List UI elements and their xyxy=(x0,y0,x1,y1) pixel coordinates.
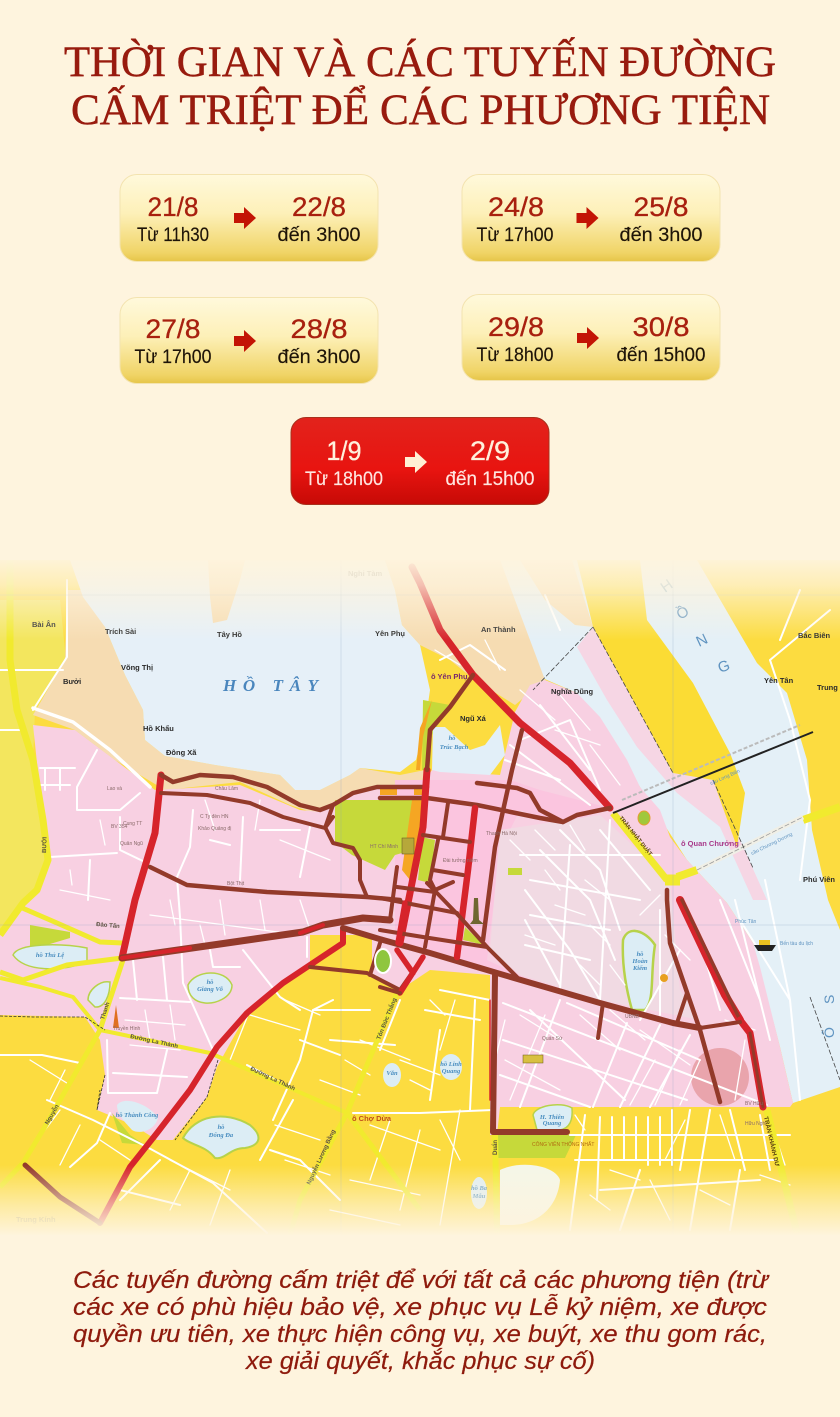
map: place labels: G xyxy=(716,657,732,677)
route: west side xyxy=(122,775,161,958)
map: place labels: N xyxy=(694,631,711,651)
route: central verticals xyxy=(400,770,427,943)
map: place labels: C Ty đèn HN xyxy=(200,814,229,820)
map: place labels: BV Hữu xyxy=(745,1101,763,1107)
map: place labels: Đường La Thành xyxy=(130,1034,179,1050)
time card: 27/8 to 28/8: 27/8 xyxy=(146,314,200,344)
time card: 21/8 to 22/8: 21/8 xyxy=(148,192,198,222)
map: old quarter and south streets xyxy=(500,820,790,1230)
map: place labels: H. Thiên xyxy=(539,1114,564,1121)
time card highlighted: 1/9 to 2/9 xyxy=(291,418,549,504)
map: place labels: hồ Ba xyxy=(471,1185,488,1192)
arrow xyxy=(576,207,598,229)
map base: yellow land xyxy=(0,560,840,1235)
time card: 27/8 to 28/8 xyxy=(120,298,378,384)
time card: 24/8 to 25/8 xyxy=(462,174,720,262)
icon: ferry xyxy=(754,945,776,951)
map: pale green-yellow west edge xyxy=(0,600,66,930)
map: West Lake xyxy=(70,560,430,790)
map: place labels: HỒ TÂY xyxy=(222,675,320,695)
icon: Eiffel style tower xyxy=(113,1005,119,1028)
icon: Hoàng Thành block xyxy=(523,1055,543,1063)
map: place labels: Quán Sứ xyxy=(542,1036,563,1042)
map: place labels: Quân Ngũ xyxy=(120,841,143,847)
map: place labels: Đào Tấn xyxy=(96,921,120,930)
time card: 29/8 to 30/8: đến 15h00 xyxy=(616,345,706,366)
time card: 29/8 to 30/8: 30/8 xyxy=(632,312,690,342)
map: place labels: Cung TT xyxy=(123,821,142,827)
map: place labels: Lao và xyxy=(107,786,122,792)
map: place labels: BƯỞI xyxy=(41,836,49,853)
map: place labels: Ngũ Xá xyxy=(460,714,487,723)
map: river sandbars xyxy=(520,560,767,900)
route: Hoàng Hoa Thám north xyxy=(161,775,427,810)
route: Yên Phụ diagonal xyxy=(412,567,610,808)
map: place labels: Võng Thị xyxy=(121,663,153,672)
map: bridges xyxy=(0,627,840,1140)
map: place labels: Nguyễn Lương Bằng xyxy=(305,1128,337,1186)
map: place labels: Yên Phụ xyxy=(375,629,405,638)
map: place labels: Ô xyxy=(821,1027,837,1038)
time card: 24/8 to 25/8: 24/8 xyxy=(488,192,544,222)
time card highlighted: 1/9 to 2/9: 2/9 xyxy=(470,436,510,466)
map: place labels xyxy=(16,569,838,1224)
map: place labels: Mẫu xyxy=(472,1193,486,1200)
arrow xyxy=(234,330,256,352)
time card: 21/8 to 22/8: đến 3h00 xyxy=(278,225,360,246)
map: place labels: cầu Long Biên xyxy=(709,768,741,787)
time card: 21/8 to 22/8: 22/8 xyxy=(292,192,346,222)
time card: 27/8 to 28/8: đến 3h00 xyxy=(278,347,360,368)
map: place labels: Đống Đa xyxy=(208,1132,234,1139)
map: place labels: Hữu Nghị xyxy=(745,1121,766,1127)
map: white street network xyxy=(0,580,830,1233)
map: place labels: Quang xyxy=(442,1068,461,1075)
map: intersections and monuments xyxy=(113,811,776,1063)
map: place labels: Đài tưởng niệm xyxy=(443,857,478,864)
map: place labels: ô Quan Chưởng xyxy=(681,839,739,848)
map: place labels: H xyxy=(658,576,676,596)
description text: quyền ưu tiên, xe thực hiện công vụ, xe buýt, xe thu gom rác, xyxy=(73,1321,767,1348)
description text: Các tuyến đường cấm triệt để với tất cả các phương tiện (trừ xyxy=(73,1267,770,1294)
map: place labels: Phú Viên xyxy=(803,875,835,884)
time card: 27/8 to 28/8: 28/8 xyxy=(290,314,348,344)
map: Red River xyxy=(500,560,840,1103)
description text xyxy=(73,1267,770,1375)
map: orange highlight blocks xyxy=(380,700,432,880)
map: place labels: Trích Sài xyxy=(105,627,136,636)
map: place labels: S xyxy=(821,995,837,1004)
map: place labels: ô Yên Phụ xyxy=(431,672,468,681)
map: place labels: Nguyễn xyxy=(44,1103,61,1126)
route: main central east-west xyxy=(343,928,700,1028)
map: pink inner city district xyxy=(0,680,793,1140)
route: Lê Duẩn xyxy=(493,975,567,1132)
map: place labels: hồ Linh xyxy=(440,1061,462,1068)
time card highlighted: 1/9 to 2/9: 1/9 xyxy=(326,436,362,466)
arrow xyxy=(234,207,256,229)
map: place labels: Thanh xyxy=(100,1001,112,1021)
map: restricted routes (red) xyxy=(25,567,763,1223)
map: place labels: hồ xyxy=(207,979,214,986)
map: place labels: HT Chí Minh xyxy=(370,844,398,850)
icon: Chương Dương bridge xyxy=(697,817,803,870)
map: place labels: Khảo Quảng đị xyxy=(198,826,231,832)
time card highlighted: 1/9 to 2/9: đến 15h00 xyxy=(446,469,534,490)
route: Kim Liên arc xyxy=(25,1165,100,1223)
arrow xyxy=(577,327,599,349)
map: place labels: Quang xyxy=(543,1120,562,1127)
map: place labels: Trung Kính xyxy=(16,1215,56,1224)
map: place labels: hồ xyxy=(218,1124,225,1131)
time card: 24/8 to 25/8: đến 3h00 xyxy=(620,225,702,246)
map: place labels: hồ xyxy=(449,735,456,742)
map: place labels: Kiếm xyxy=(632,965,647,972)
map: place labels: Nghi Tàm xyxy=(348,569,382,578)
time card highlighted: 1/9 to 2/9: Từ 18h00 xyxy=(305,469,383,490)
map: denser secondary streets xyxy=(30,640,790,1225)
description text: xe giải quyết, khắc phục sự cố) xyxy=(245,1348,595,1375)
map: place labels: hồ Thành Công xyxy=(116,1112,159,1119)
map: place labels: hồ xyxy=(637,951,644,958)
map: place labels: Tây Hồ xyxy=(217,630,242,639)
map: place labels: Bài Ân xyxy=(32,620,56,629)
icon: Long Biên ramp xyxy=(638,811,650,825)
map: fade to background at top xyxy=(0,555,840,640)
map: place labels: hồ Thủ Lệ xyxy=(36,952,64,959)
map: place labels: Đường La Thành xyxy=(249,1066,296,1092)
map: place labels: Bưởi xyxy=(63,677,81,686)
map: place labels: CÔNG VIÊN THỐNG NHẤT xyxy=(532,1140,594,1148)
map: place labels: Châu Lâm xyxy=(215,786,238,792)
map: lakes xyxy=(13,725,655,1225)
route: Hoàng Hoa Thám south xyxy=(150,867,400,900)
map: place labels: TRẦN NHẬT DUẬT xyxy=(617,815,654,858)
title xyxy=(64,38,776,134)
map: place labels: Hồ Khẩu xyxy=(143,724,174,733)
map: fade to background at bottom xyxy=(0,1165,840,1236)
map: place labels: Giảng Võ xyxy=(197,986,224,993)
map: old quarter lighter zone xyxy=(490,815,700,1020)
map: place labels: UBND xyxy=(625,1014,640,1020)
map: West Lake peninsula xyxy=(208,560,245,623)
map: place labels: ô Chợ Dừa xyxy=(352,1114,392,1123)
icon: one pillar statue xyxy=(470,898,484,924)
time card: 21/8 to 22/8: Từ 11h30 xyxy=(137,225,209,246)
icon: stadium Hàng Đẫy xyxy=(375,949,391,973)
map: place labels: Văn xyxy=(386,1070,398,1077)
map: place labels: Tôn Đức Thắng xyxy=(375,997,399,1041)
map: place labels: Yên Tân xyxy=(764,676,794,685)
time card: 29/8 to 30/8: Từ 18h00 xyxy=(476,345,554,366)
map: place labels: Duẩn xyxy=(492,1140,499,1155)
title: CẤM TRIỆT ĐỂ CÁC PHƯƠNG TIỆN xyxy=(71,86,770,134)
time card: 27/8 to 28/8: Từ 17h00 xyxy=(134,347,212,368)
arrow xyxy=(405,451,427,473)
time card: 24/8 to 25/8: 25/8 xyxy=(634,192,688,222)
map: place labels: Đông Xã xyxy=(166,748,197,757)
map: place labels: cầu Chương Dương xyxy=(750,831,794,857)
route: Thụy Khuê xyxy=(161,793,333,828)
map: place labels: Trúc Bạch xyxy=(440,744,469,751)
map: place labels: BV 354 xyxy=(111,824,128,830)
map: place labels: TRẦN KHÁNH DƯ xyxy=(762,1116,780,1167)
map: place labels: Bột Thịt xyxy=(227,881,245,887)
title: THỜI GIAN VÀ CÁC TUYẾN ĐƯỜNG xyxy=(64,38,776,86)
time card: 21/8 to 22/8 xyxy=(120,174,378,262)
icon: Ba Đình gate xyxy=(402,838,414,854)
map: yellow area south of route xyxy=(310,935,372,975)
map: place labels: Hoàn xyxy=(631,958,648,965)
map: Hoàng Diệu pink circle xyxy=(691,1048,749,1106)
route: Kim Mã - Giảng Võ xyxy=(122,918,390,958)
map: place labels: Nghĩa Dũng xyxy=(551,687,593,696)
time card: 24/8 to 25/8: Từ 17h00 xyxy=(476,225,554,246)
route: Trần Quang Khải east xyxy=(680,900,740,1020)
map: tan land around West Lake xyxy=(33,560,545,815)
time card: 29/8 to 30/8: 29/8 xyxy=(488,312,544,342)
map: parks xyxy=(30,700,576,1158)
map: place labels: Bến tàu du lịch xyxy=(780,941,813,947)
map: yellow main roads xyxy=(0,560,840,1235)
time card: 29/8 to 30/8 xyxy=(462,294,720,380)
map: place labels: Bắc Biên xyxy=(798,631,831,640)
map of Hanoi with restricted routes xyxy=(0,555,840,1236)
route: Đê La Thành south-west xyxy=(100,930,343,1223)
map: place labels: An Thành xyxy=(481,625,516,634)
map: bright pink central zone xyxy=(395,780,610,985)
map: place labels: Ồ xyxy=(673,602,692,623)
description text: các xe có phù hiệu bảo vệ, xe phục vụ Lễ kỷ niệm, xe được xyxy=(73,1293,767,1321)
map: place labels: Phúc Tân xyxy=(735,919,757,925)
icon: Long Biên bridge xyxy=(613,732,813,813)
map: place labels: Trung xyxy=(817,683,838,692)
map: place labels: Thanh Hà Nội xyxy=(486,831,517,837)
map: place labels: Truyền Hình xyxy=(113,1026,141,1032)
icon: star monument xyxy=(660,974,668,982)
